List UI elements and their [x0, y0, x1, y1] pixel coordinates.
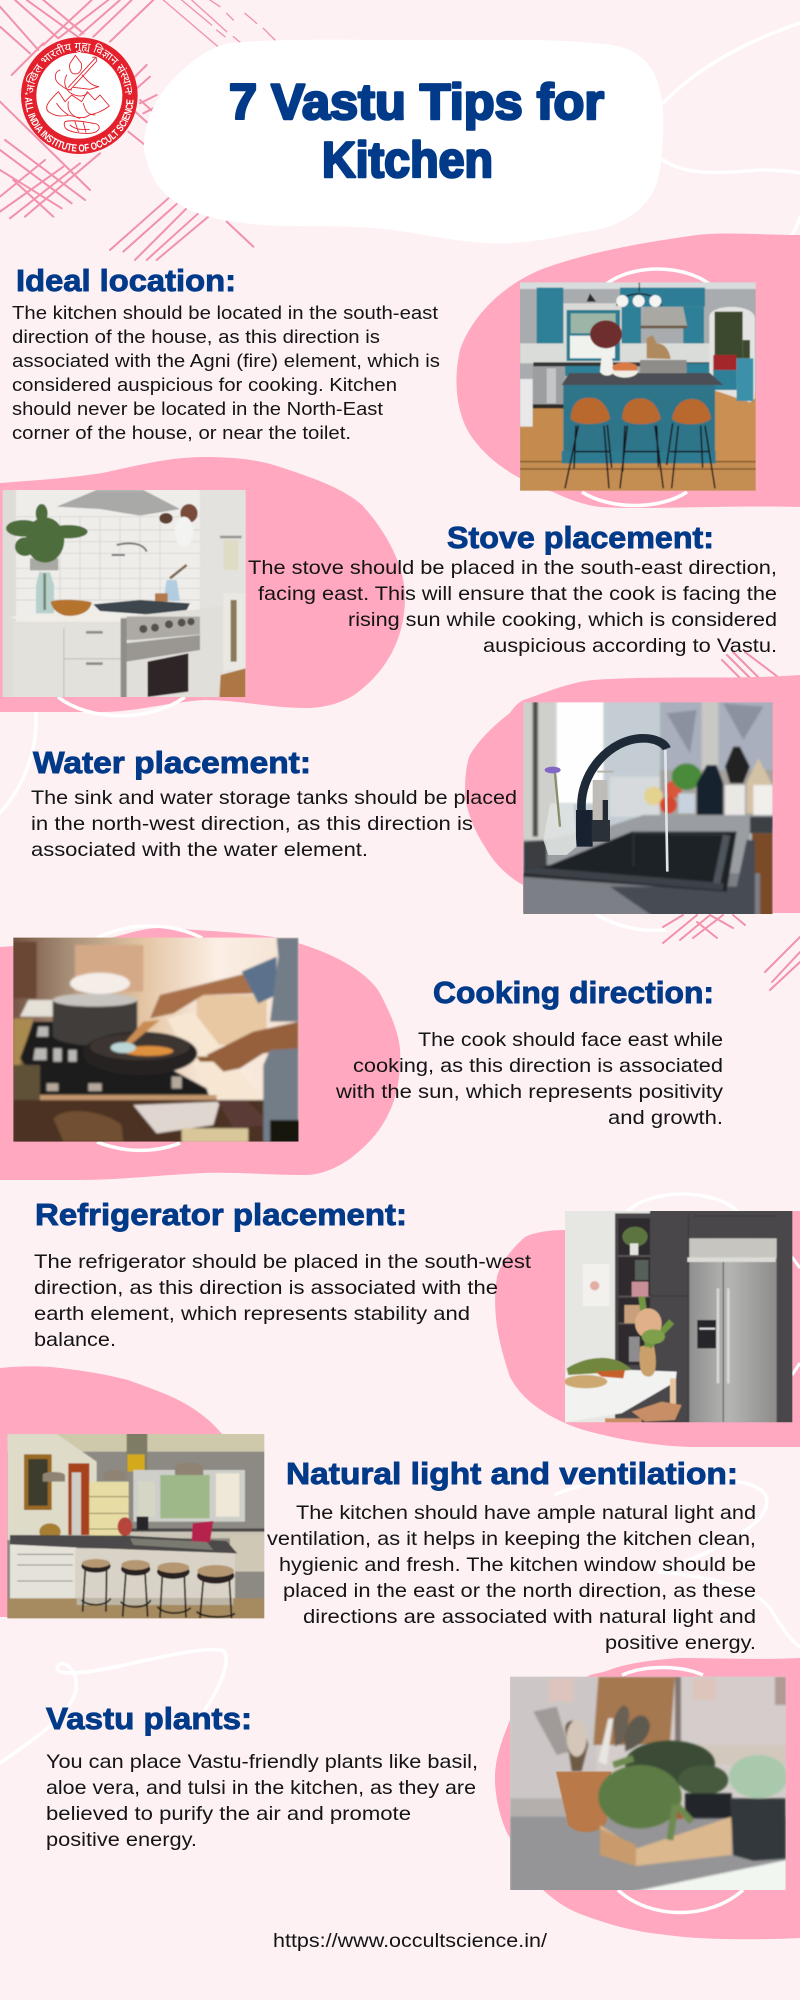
logo: All India Institute of Occult Science seal: *: [25, 90, 29, 100]
body text: The cook should face east while: [418, 1029, 723, 1051]
body text: The sink and water storage tanks should be placed: [31, 787, 517, 809]
body text: You can place Vastu-friendly plants like basil,: [46, 1751, 478, 1773]
photo: white kitchen with range: [0, 485, 253, 705]
pink blob: [495, 1658, 800, 1939]
panel: stove placement: [0, 457, 777, 716]
body text: The stove should be placed in the south-east direction,: [248, 557, 777, 579]
body text: [267, 1502, 756, 1654]
logo: All India Institute of Occult Science seal: ALL INDIA INSTITUTE OF OCCULT SCIENCE: [24, 98, 134, 152]
body text: [335, 1029, 723, 1129]
pink blob: [0, 1366, 222, 1617]
body text: The kitchen should be located in the south-east: [12, 302, 438, 323]
body text: direction of the house, as this direction is: [12, 326, 380, 347]
body text: placed in the east or the north direction, as these: [283, 1580, 756, 1602]
body text: positive energy.: [46, 1829, 197, 1851]
heading: Stove placement:: [447, 520, 714, 555]
body text: direction, as this direction is associated with the: [34, 1277, 498, 1299]
photo: cooking on a gas stove: [13, 938, 299, 1142]
pink blob: [495, 1211, 800, 1447]
pink blob: [456, 233, 800, 508]
body text: [46, 1751, 478, 1851]
heading: Ideal location:: [16, 263, 236, 298]
pink blob: [465, 675, 800, 913]
photo: kitchen bar with four stools: [7, 1434, 264, 1618]
body text: hygienic and fresh. The kitchen window should be: [279, 1554, 756, 1576]
title: Kitchen: [322, 132, 493, 188]
heading: Natural light and ventilation:: [286, 1456, 738, 1491]
title: [229, 74, 604, 188]
logo: All India Institute of Occult Science seal: अखिल भारतीय गुह्य विज्ञान संस्थान: [26, 42, 132, 94]
ring arcs: [618, 1668, 743, 1912]
body text: facing east. This will ensure that the cook is facing the: [258, 583, 777, 605]
panel: cooking direction: [0, 926, 723, 1180]
body text: considered auspicious for cooking. Kitchen: [12, 374, 397, 395]
title: 7 Vastu Tips for: [229, 74, 604, 130]
heading: Water placement:: [33, 745, 311, 780]
pink blob: [0, 457, 405, 712]
photo: teal kitchen with island: [520, 282, 756, 491]
body text: rising sun while cooking, which is considered: [348, 609, 777, 631]
body text: [34, 1251, 532, 1351]
body text: balance.: [34, 1329, 116, 1351]
body text: positive energy.: [605, 1632, 756, 1654]
ring arc: [58, 697, 185, 716]
ring arcs: [97, 926, 202, 1150]
body text: with the sun, which represents positivity: [335, 1081, 723, 1103]
body text: [12, 302, 440, 443]
pink blob: [0, 928, 400, 1180]
panel: refrigerator placement: [34, 1194, 800, 1447]
photo: stainless refrigerator in dark cabinets: [565, 1211, 792, 1422]
panel: vastu plants: [46, 1658, 800, 1939]
heading: Vastu plants:: [46, 1701, 252, 1736]
body text: in the north-west direction, as this direction is: [31, 813, 473, 835]
body text: directions are associated with natural light and: [303, 1606, 756, 1628]
panel: natural light and ventilation: [0, 1366, 756, 1654]
website footer: https://www.occultscience.in/: [273, 1930, 548, 1952]
body text: aloe vera, and tulsi in the kitchen, as they are: [46, 1777, 476, 1799]
body text: ventilation, as it helps in keeping the kitchen clean,: [267, 1528, 756, 1550]
panel: water placement: [31, 675, 800, 923]
body text: auspicious according to Vastu.: [483, 635, 777, 657]
ring arcs: [582, 269, 716, 506]
heading: Refrigerator placement:: [35, 1197, 407, 1232]
body text: should never be located in the North-East: [12, 398, 383, 419]
body text: earth element, which represents stability and: [34, 1303, 470, 1325]
body text: associated with the water element.: [31, 839, 368, 861]
photo: potted plants on a counter: [510, 1676, 786, 1890]
logo: All India Institute of Occult Science seal: [21, 37, 138, 154]
body text: associated with the Agni (fire) element, which is: [12, 350, 440, 371]
panel: ideal location: [12, 233, 800, 508]
body text: cooking, as this direction is associated: [353, 1055, 723, 1077]
photo: black sink and faucet: [523, 702, 773, 914]
heading: Cooking direction:: [433, 975, 714, 1010]
title blob: [144, 40, 663, 243]
body text: The kitchen should have ample natural light and: [296, 1502, 756, 1524]
body text: corner of the house, or near the toilet.: [12, 422, 351, 443]
body text: believed to purify the air and promote: [46, 1803, 411, 1825]
body text: The refrigerator should be placed in the south-west: [34, 1251, 532, 1273]
body text: and growth.: [608, 1107, 723, 1129]
body text: [31, 787, 517, 861]
ring arc: [627, 1194, 738, 1212]
logo: All India Institute of Occult Science seal: *: [128, 90, 132, 100]
body text: [248, 557, 777, 657]
